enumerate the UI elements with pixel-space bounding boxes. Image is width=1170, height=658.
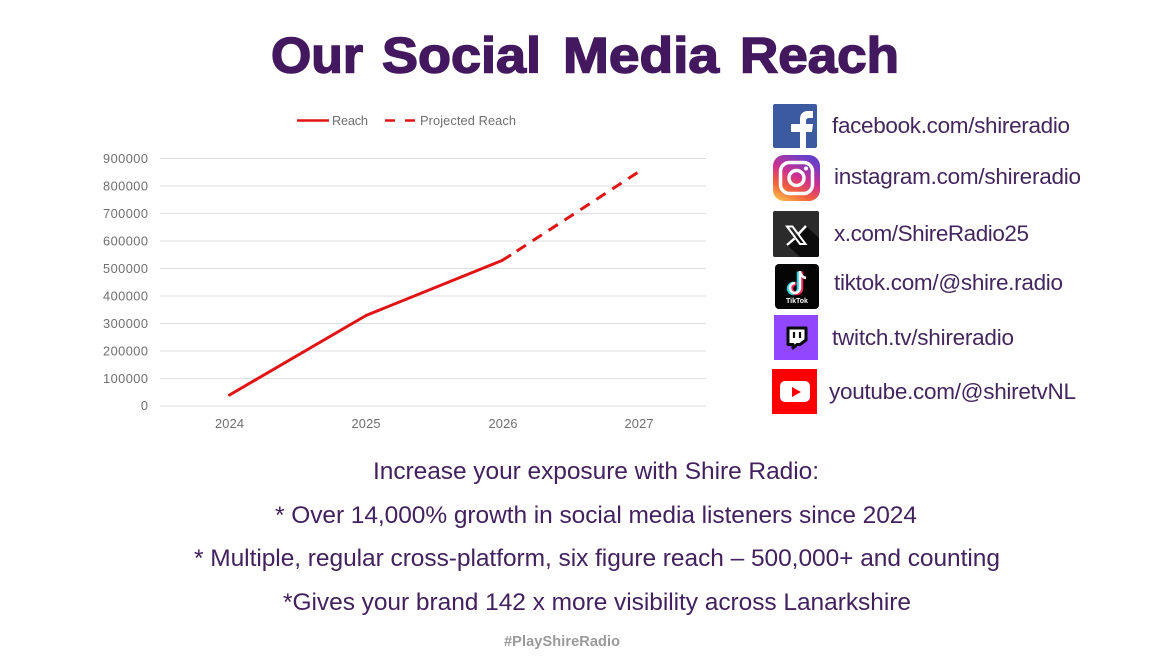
- icon: tiktok: TikTok: [786, 298, 808, 305]
- y axis labels: 900000: [103, 151, 148, 166]
- title: Social: [382, 28, 541, 84]
- benefits text: * Multiple, regular cross-platform, six figure reach – 500,000+ and counting: [194, 545, 1000, 572]
- link: twitch: twitch.tv/shireradio: [832, 325, 1014, 350]
- reach line: [230, 256, 510, 395]
- y axis labels: 200000: [103, 344, 148, 358]
- y axis labels: 700000: [103, 206, 148, 221]
- gridlines: [160, 158, 706, 406]
- icon: x: [773, 211, 819, 257]
- y axis labels: 300000: [103, 316, 148, 331]
- chart legend: Reach: [332, 113, 368, 128]
- projected reach line: [510, 171, 640, 256]
- link: tiktok: tiktok.com/@shire.radio: [834, 270, 1063, 295]
- benefits text: [194, 458, 1000, 616]
- y axis labels: 800000: [103, 178, 148, 194]
- title: Media: [563, 28, 720, 84]
- y axis labels: [103, 151, 148, 413]
- line chart: reach: [103, 113, 706, 431]
- y axis labels: 0: [141, 398, 148, 413]
- x axis labels: 2024: [215, 416, 244, 431]
- chart legend: Projected Reach: [420, 113, 516, 128]
- y axis labels: 600000: [103, 234, 148, 248]
- x axis labels: [215, 416, 654, 431]
- x axis labels: 2025: [352, 416, 380, 431]
- icon: youtube: [772, 369, 817, 414]
- icon: twitch: [774, 315, 818, 360]
- icon: instagram: [773, 155, 820, 201]
- y axis labels: 400000: [103, 288, 148, 304]
- chart legend: [297, 113, 516, 128]
- x axis labels: 2027: [624, 416, 654, 431]
- y axis labels: 100000: [103, 371, 148, 386]
- title: Reach: [740, 28, 899, 84]
- hashtag: #PlayShireRadio: [504, 634, 620, 650]
- y axis labels: 500000: [103, 261, 148, 276]
- link: instagram: instagram.com/shireradio: [834, 164, 1081, 189]
- benefits text: Increase your exposure with Shire Radio:: [373, 458, 819, 485]
- title: [271, 28, 899, 84]
- social links: [772, 104, 1081, 414]
- link: youtube: youtube.com/@shiretvNL: [829, 379, 1076, 404]
- benefits text: *Gives your brand 142 x more visibility across Lanarkshire: [283, 589, 911, 616]
- icon: tiktok: [775, 264, 819, 309]
- benefits text: * Over 14,000% growth in social media listeners since 2024: [275, 502, 917, 529]
- x axis labels: 2026: [488, 416, 518, 431]
- link: x: x.com/ShireRadio25: [834, 221, 1029, 246]
- link: facebook: facebook.com/shireradio: [832, 113, 1070, 138]
- title: Our: [271, 28, 363, 84]
- icon: facebook: [773, 104, 817, 148]
